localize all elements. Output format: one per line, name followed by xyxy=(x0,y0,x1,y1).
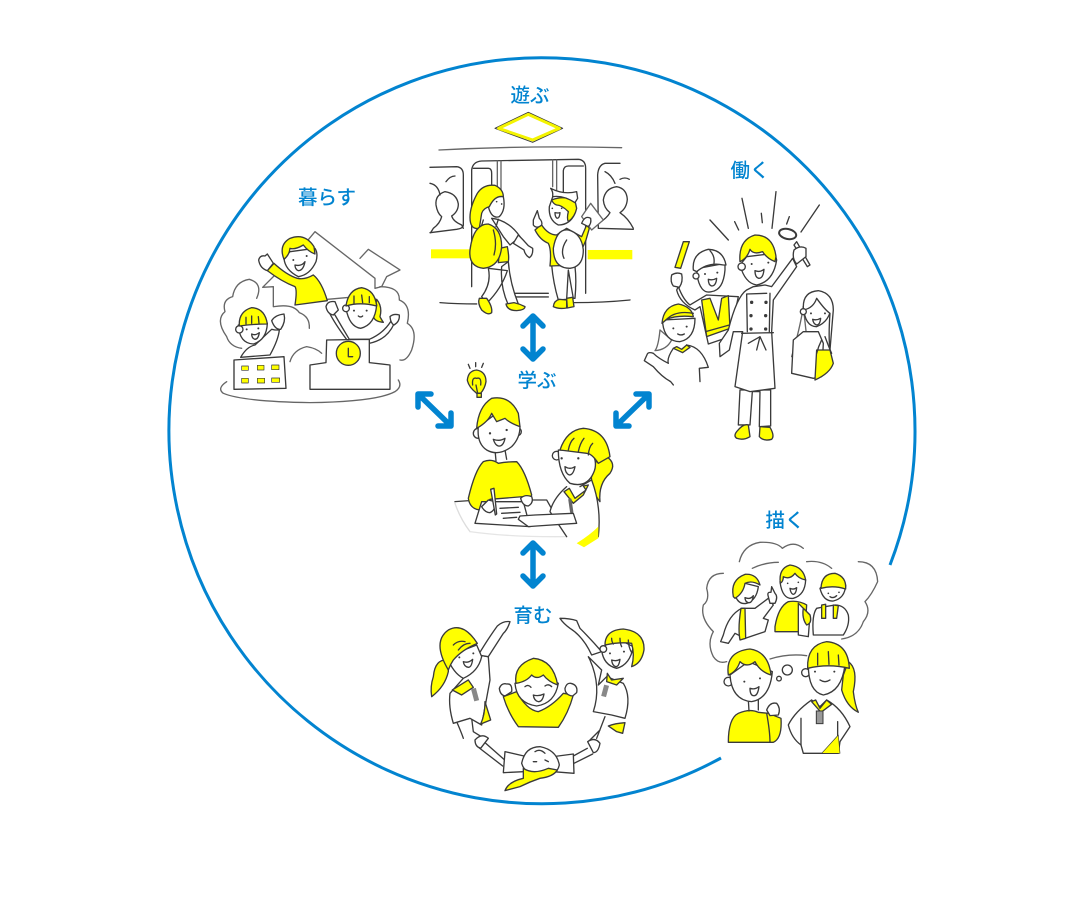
icon: ceiling diamond sign xyxy=(495,112,563,142)
girl with ponytail xyxy=(518,428,613,547)
small thought dots xyxy=(777,665,792,681)
man waving above the town xyxy=(259,237,327,305)
arrow: learn to living xyxy=(418,394,451,426)
chef xyxy=(719,227,810,440)
boy with raised fist xyxy=(724,649,781,742)
arrow: learn to work xyxy=(616,394,649,426)
heading: imagine: 描く xyxy=(765,510,805,532)
worker with vest xyxy=(671,242,738,344)
boy in the middle xyxy=(499,658,577,727)
heading: learn: 学ぶ xyxy=(517,370,557,392)
girl at the bottom xyxy=(475,736,600,791)
boy behind school building xyxy=(234,308,286,389)
panel: imagine, thought bubble scene xyxy=(703,542,878,753)
panel: nurture, children in a circle xyxy=(431,618,644,791)
girl top left xyxy=(431,622,510,740)
thought cloud outline xyxy=(703,542,878,662)
boy writing xyxy=(455,398,567,537)
girl with yellow backpack xyxy=(470,185,533,314)
icon: light bulb xyxy=(467,363,486,397)
panel: learn, two children studying xyxy=(455,363,613,547)
boy with white backpack xyxy=(533,188,603,308)
train interior lines xyxy=(430,147,633,304)
heading: play: 遊ぶ xyxy=(510,85,550,107)
town clouds and houses xyxy=(220,232,414,403)
heading: living: 暮らす xyxy=(298,187,356,209)
panel: living, town scene xyxy=(220,232,414,403)
arrow: learn to nurture xyxy=(523,543,543,586)
arrow: learn to play xyxy=(523,316,543,359)
heading: work: 働く xyxy=(730,160,770,182)
three children in the thought bubble xyxy=(721,565,849,643)
girl with ponytail xyxy=(788,642,858,753)
emphasis rays xyxy=(710,192,819,240)
girl behind clock tower xyxy=(310,288,399,389)
heading: nurture: 育む xyxy=(513,605,553,627)
large circle outline xyxy=(169,58,915,804)
boy top right xyxy=(560,618,644,740)
panel: work, professions scene xyxy=(644,192,833,440)
panel: play, train scene xyxy=(430,112,633,314)
girl with yellow cap xyxy=(644,304,708,386)
office woman with bag xyxy=(792,291,833,380)
